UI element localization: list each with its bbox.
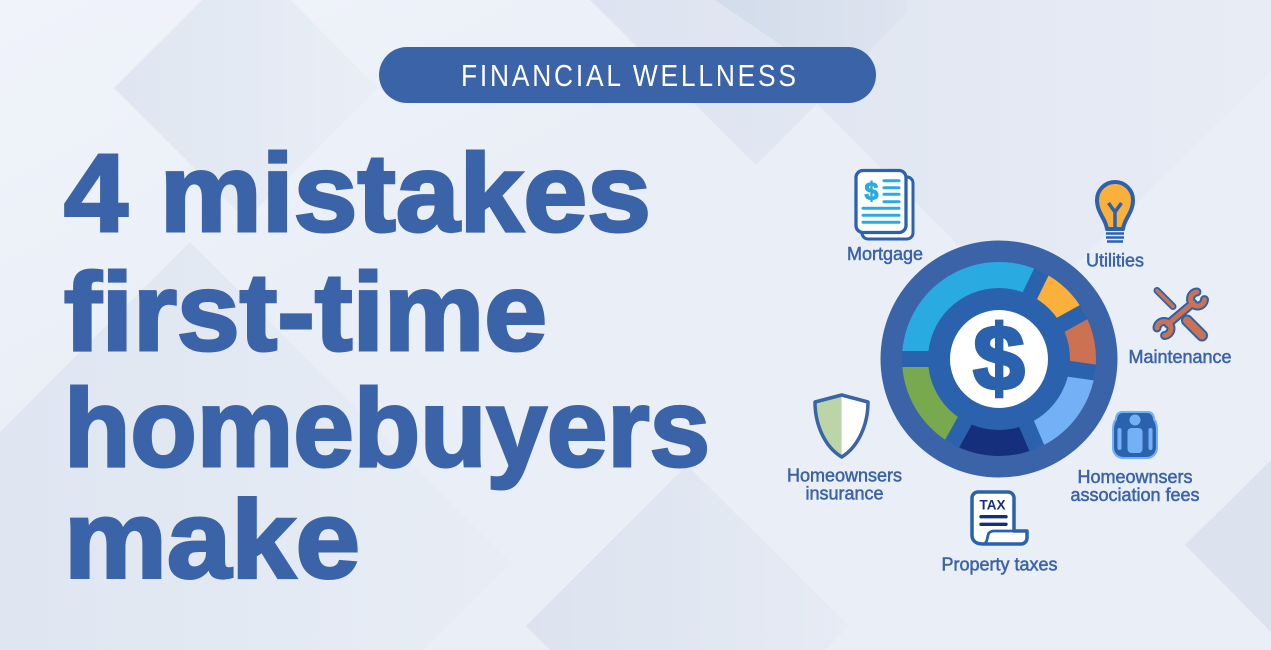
pill label: FINANCIAL WELLNESS <box>461 59 796 94</box>
icon: mortgage document <box>856 170 913 239</box>
title: 4 mistakes <box>64 132 651 255</box>
label: homeowners insurance: insurance <box>805 484 884 504</box>
dollar sign: $ <box>973 308 1025 410</box>
icon: shield <box>815 395 868 457</box>
segment: insurance <box>902 359 999 444</box>
icon: tax scroll <box>972 492 1027 544</box>
label: homeowners insurance: Homeownsers <box>787 466 902 486</box>
icon: mortgage document: $ <box>865 178 879 206</box>
label: association fees <box>1070 467 1200 505</box>
label: association fees: association fees <box>1070 485 1200 505</box>
label: property taxes: Property taxes <box>941 554 1058 574</box>
donut chart <box>880 240 1118 478</box>
title: homebuyers <box>64 367 710 490</box>
segment: maintenance <box>999 312 1096 372</box>
label: mortgage: Mortgage <box>847 244 923 264</box>
title: make <box>64 478 360 602</box>
label: utilities: Utilities <box>1086 250 1144 270</box>
icon: people group <box>1112 411 1158 459</box>
header pill <box>379 47 876 103</box>
icon: tax scroll: TAX <box>980 498 1006 512</box>
icon: light bulb <box>1097 182 1133 242</box>
title <box>64 132 710 601</box>
label: maintenance: Maintenance <box>1128 347 1232 367</box>
segment: association fees <box>999 359 1095 448</box>
label: association fees: Homeownsers <box>1077 467 1193 487</box>
segment: utilities <box>999 272 1084 359</box>
icon: wrench and screwdriver <box>1157 290 1204 336</box>
segment: property taxes <box>952 359 1037 456</box>
label: homeowners insurance <box>787 466 902 504</box>
title: first-time <box>64 251 547 374</box>
segment: mortgage <box>902 262 1042 359</box>
